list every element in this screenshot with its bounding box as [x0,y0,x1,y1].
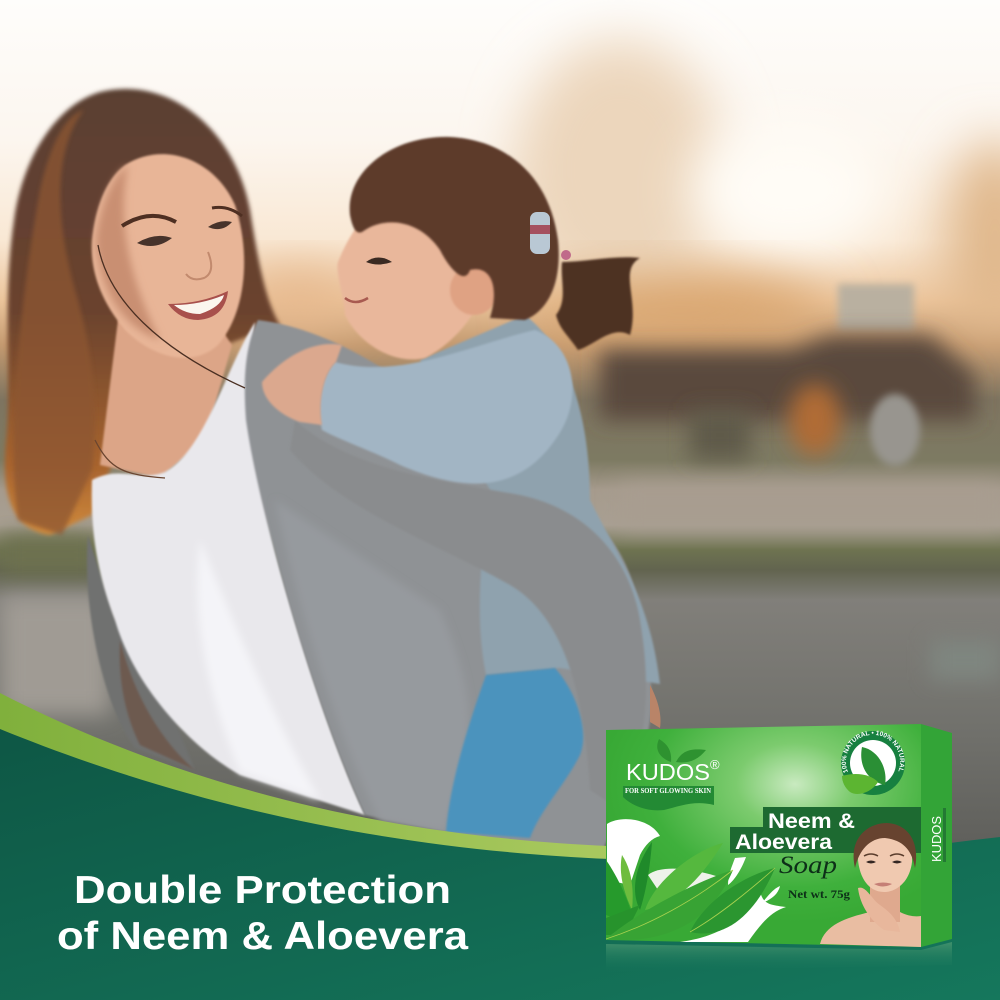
woman smile [168,291,228,320]
product name [735,810,855,854]
child eye and mouth [345,258,392,302]
woman front hair strands [14,110,95,535]
model on box [820,823,921,947]
100% natural badge [841,730,905,795]
woman back hair [5,89,280,535]
side panel brand: KUDOS [929,816,944,862]
woman eyes and brows [122,207,242,279]
headline [57,869,468,958]
light green curved band [0,693,610,880]
cardigan left sliver [87,535,195,770]
woman neck [100,320,232,478]
product reflection [606,942,952,972]
brand name: KUDOS [626,759,710,785]
dark green wave panel [0,729,1000,1000]
soap box product [606,724,952,947]
woman arm across child [290,420,646,810]
soap script: Soap [779,852,837,879]
child hair clip [530,212,571,260]
registered mark: ® [710,757,720,772]
box side panel [921,724,952,947]
child sleeve [320,330,572,484]
woman hand on hip [650,685,661,728]
child ponytail [556,257,640,350]
child knit back [420,315,660,684]
woman white shirt [92,322,365,815]
logo leaves [657,739,706,762]
photo: woman [5,89,661,848]
tagline ribbon [623,786,714,810]
net weight: Net wt. 75g [788,889,850,901]
tagline ribbon: FOR SOFT GLOWING SKIN [625,787,712,795]
aloe vera blades [606,842,652,935]
brown gap under shirt [120,640,195,770]
child jeans [446,668,583,838]
product name: Neem & [768,810,855,833]
woman grey cardigan [245,320,652,848]
neem leaves [606,843,775,940]
product name banner [730,807,921,853]
woman face [92,154,244,358]
product name: Aloevera [735,831,832,854]
child hair [350,137,559,320]
100% natural badge: 100% NATURAL • 100% NATURAL [842,730,904,773]
child face [337,204,486,359]
headline: of Neem & Aloevera [57,915,468,958]
headline: Double Protection [74,869,451,912]
milk splash [607,819,786,942]
woman shadowed cheek [96,165,160,340]
box front panel [606,724,921,947]
child ear [450,265,498,315]
child hand [262,344,342,425]
